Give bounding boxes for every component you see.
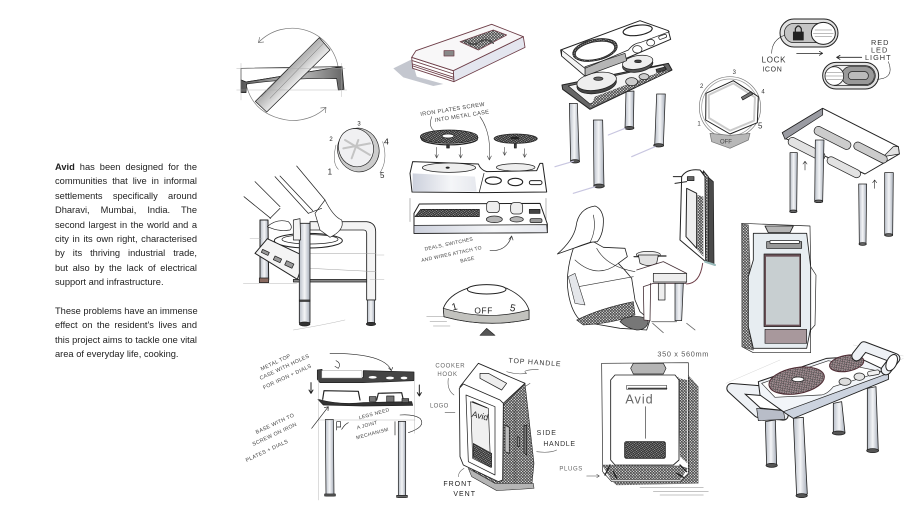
sketches: lower left group — [245, 353, 583, 500]
label: red LED light — [837, 38, 892, 79]
label: red LED light: LIGHT — [865, 53, 892, 62]
label: base with screw: PLATES + DIALS — [245, 439, 289, 464]
text block: project description: but also by the lack of electrical — [55, 263, 197, 273]
sketch: iron plates — [420, 130, 537, 158]
text block: project description: These problems have an immense — [55, 306, 198, 316]
text block: project description: support and infrastructure. — [55, 277, 164, 287]
label: cooker annotations: SIDE — [537, 430, 557, 437]
sketch: off dial side view: OFF — [474, 305, 493, 315]
label: dials, switches and wires — [421, 236, 513, 265]
label: cooker annotations: FRONT — [443, 481, 472, 488]
label: lock icon: ICON — [762, 66, 782, 73]
sketch: round dial with numbers: 5 — [380, 171, 385, 180]
sketches: lower right group — [587, 345, 903, 498]
sketch: hexagonal dial: 4 — [761, 89, 765, 95]
sketch: metal top case — [410, 162, 547, 222]
text block: project description: Dharavi, Mumbai, India. The — [55, 205, 197, 215]
sketch: off dial side view: 1 — [451, 301, 459, 314]
sketch: hands holding bench — [243, 166, 384, 330]
text block: project description: Avid has been designed for the — [55, 162, 197, 172]
label: cooker annotations: PLUGS — [559, 467, 583, 473]
label: lock icon: LOCK — [762, 56, 786, 65]
text block: project description: effect on the resident's lives and — [55, 320, 197, 330]
sketch: hexagonal dial: 3 — [733, 70, 737, 76]
sketch: hexagonal dial — [697, 70, 765, 148]
text block: project description: city in its own right, characterised — [55, 234, 197, 244]
sketch: person cooking — [557, 206, 703, 333]
label: base with screw: SCREW ON IRON — [252, 422, 298, 448]
sketch: underside of top with legs — [782, 108, 899, 245]
sketch: cooker front perspective: Avid — [625, 392, 654, 406]
sketch: hexagonal dial: OFF — [720, 139, 732, 145]
sketch: exploded cooker — [555, 21, 672, 193]
sketch: final cooker on stand — [726, 345, 903, 498]
text block: project description: this project aims to tackle one vital — [55, 335, 197, 345]
sketch: round dial with numbers: 1 — [328, 168, 333, 177]
sketch: LED toggle — [823, 62, 879, 89]
label: metal top case: FOR IRON + DIALS — [262, 363, 313, 391]
sketch: cooker perspective view: Avid — [471, 409, 490, 423]
sketch: book-like closed case — [393, 24, 525, 86]
label: cooker annotations: TOP HANDLE — [508, 358, 562, 368]
sketch: round dial with numbers: 3 — [357, 121, 361, 127]
text block: project description: area of everyday life, cooking. — [55, 349, 179, 359]
label: metal top case: METAL TOP — [260, 353, 292, 372]
label: legs need joint: LEGS NEED — [358, 407, 390, 421]
sketch: cooker front view — [742, 223, 816, 353]
label: iron plates — [420, 102, 491, 160]
text block: project description: second largest in the world and a — [55, 220, 197, 230]
sketches: upper left column — [237, 24, 547, 335]
label: base with screw — [245, 413, 298, 464]
sketch: hexagonal dial: 2 — [700, 84, 704, 90]
label: legs need joint: A JOINT — [356, 420, 378, 431]
sketch: wall-hung cooker — [673, 170, 715, 265]
label: red LED light: RED — [871, 38, 889, 47]
sketch: exploded side view with legs — [309, 353, 422, 500]
label: cooker annotations: HANDLE — [543, 441, 576, 448]
label: cooker annotations — [430, 358, 583, 498]
label: red LED light: LED — [871, 46, 888, 55]
sketch: lock toggle — [780, 19, 838, 47]
label: cooker annotations: COOKER — [435, 363, 465, 369]
sketch: round dial with numbers — [328, 121, 389, 180]
label: legs need joint: MECHANISM — [356, 427, 390, 441]
label: cooker annotations: HOOK — [437, 372, 458, 378]
sketch: cooker front perspective — [587, 350, 709, 495]
sketch: rotating slab — [237, 28, 347, 121]
label: dials, switches and wires: AND WIRES ATTACH TO — [421, 245, 482, 264]
label: dials, switches and wires: DEALS, SWITCHES — [424, 236, 474, 253]
sketch: off dial side view: 5 — [509, 303, 517, 315]
text block: project description: communities that live in informal — [55, 176, 197, 186]
sketch: off dial side view — [427, 285, 529, 335]
sketch: hexagonal dial: 5 — [758, 121, 763, 130]
label: cooker annotations: VENT — [453, 491, 476, 498]
sketch: round dial with numbers: 2 — [329, 137, 333, 143]
sketches: upper right column — [555, 19, 899, 353]
label: dials, switches and wires: BASE — [460, 256, 476, 265]
label: lock icon — [762, 35, 823, 73]
text block: project description: settlements specifically around — [55, 191, 197, 201]
label: iron plates: IRON PLATES SCREW — [420, 102, 486, 118]
text block: project description — [55, 162, 198, 359]
label: legs need joint — [356, 407, 390, 441]
label: iron plates: INTO METAL CASE — [434, 109, 490, 124]
sketch: cooker front perspective: 350 x 560mm — [657, 350, 709, 359]
label: metal top case: CASE WITH HOLES — [259, 353, 311, 382]
text block: project description: by its thriving industrial trade, — [55, 248, 197, 258]
sketch: hexagonal dial: 1 — [697, 121, 701, 127]
label: base with screw: BASE WITH TO — [255, 413, 296, 436]
label: cooker annotations: LOGO — [430, 404, 449, 410]
sketch: round dial with numbers: 4 — [384, 136, 389, 146]
sketch: base with dials — [414, 201, 547, 233]
sketch: cooker perspective view — [459, 363, 534, 491]
